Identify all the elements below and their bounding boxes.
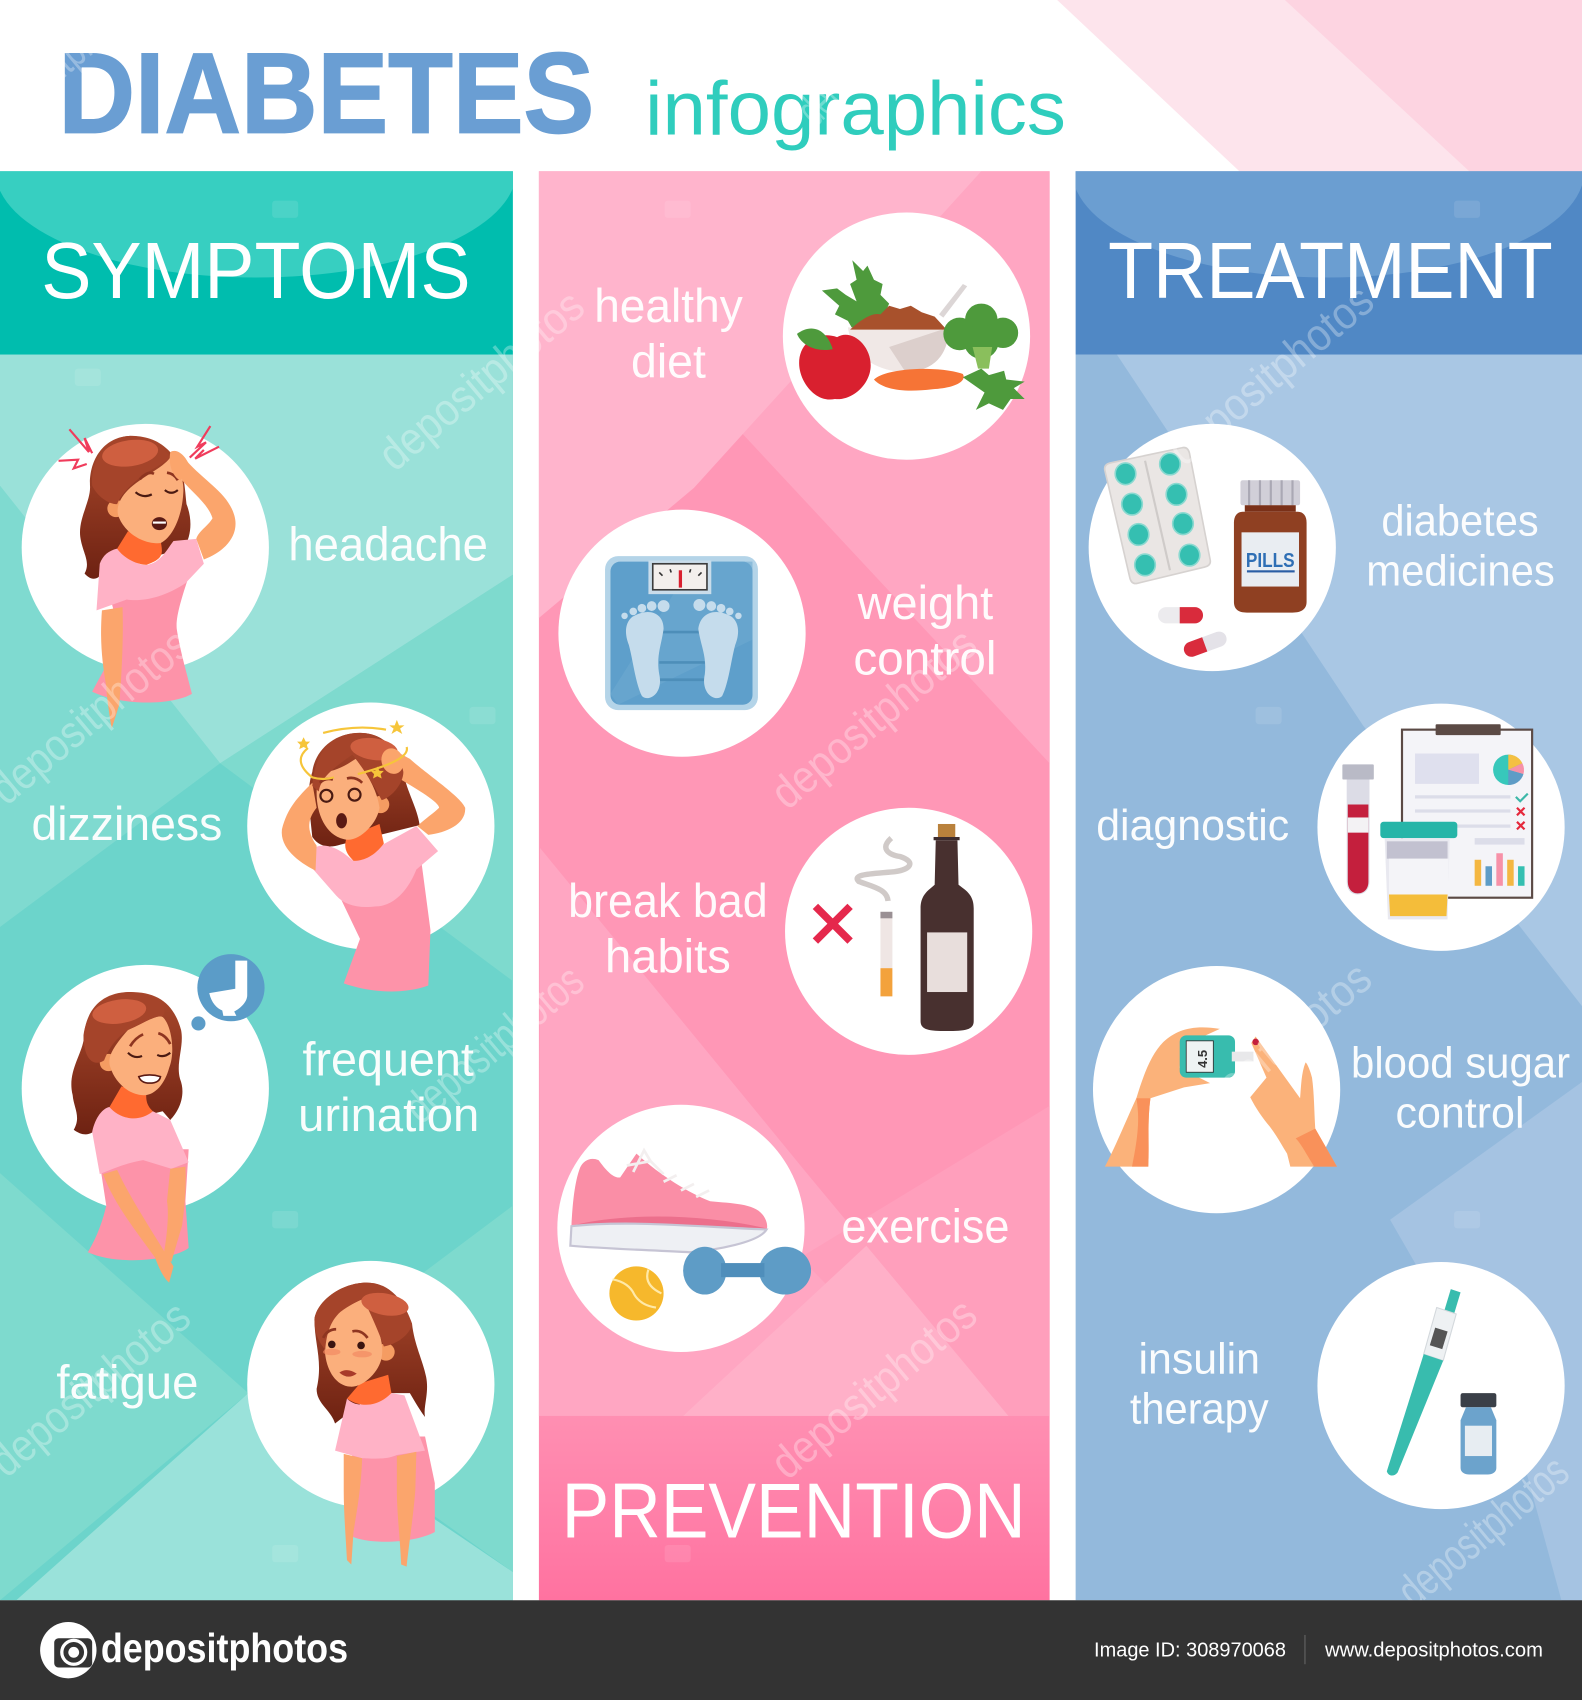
watermarks: depositphotos xyxy=(1158,274,1383,475)
treatment: diabetes medicines label xyxy=(1366,498,1555,595)
symptom label: headache: headache xyxy=(288,519,488,572)
footer band xyxy=(0,1600,1582,1700)
icon: blood sugar meter and hands xyxy=(1093,966,1340,1213)
treatment: insulin therapy label: therapy xyxy=(1130,1386,1269,1434)
watermarks: depositphotos xyxy=(761,1288,986,1489)
icon: diabetes medicines xyxy=(1089,424,1336,671)
icon: insulin pen and vial xyxy=(1317,1262,1565,1509)
icon: weight scale xyxy=(558,510,806,757)
prevention: break bad habits label: habits xyxy=(605,931,731,984)
prevention footer heading: PREVENTION xyxy=(562,1466,1026,1554)
treatment: diagnostic label: diagnostic xyxy=(1096,802,1289,850)
prevention: weight control label xyxy=(853,577,996,685)
faint camera watermarks xyxy=(75,201,1480,1562)
watermarks: depositphotos xyxy=(761,618,986,819)
panel: symptoms xyxy=(0,65,516,1600)
prevention: exercise label: exercise xyxy=(841,1200,1009,1253)
symptom: headache xyxy=(22,424,269,729)
treatment: insulin therapy label: insulin xyxy=(1139,1336,1260,1384)
icon: cigarette and alcohol xyxy=(785,808,1032,1055)
prevention: healthy diet label xyxy=(594,280,743,388)
footer divider xyxy=(1304,1635,1306,1664)
treatment header: TREATMENT xyxy=(1108,226,1553,316)
treatment: blood sugar control label: control xyxy=(1395,1090,1525,1138)
title: DIABETES xyxy=(59,30,594,157)
prevention: break bad habits label: break bad xyxy=(568,875,768,928)
symptoms header xyxy=(0,171,513,355)
treatment: diabetes medicines label: medicines xyxy=(1366,547,1555,595)
watermarks: depositphotos xyxy=(394,955,593,1133)
treatment: diabetes medicines label: diabetes xyxy=(1381,498,1539,546)
prevention: healthy diet label: diet xyxy=(631,335,706,388)
title: infographics xyxy=(645,66,1066,151)
footer image id: Image ID: 308970068 xyxy=(1094,1640,1286,1662)
symptoms header: SYMPTOMS xyxy=(41,226,471,316)
icon: toilet thought bubble xyxy=(191,954,265,1031)
symptom: fatigue xyxy=(247,1261,494,1567)
treatment: blood sugar control label: blood sugar xyxy=(1351,1040,1570,1088)
header decorative pink bands xyxy=(1057,0,1582,171)
panel: prevention xyxy=(539,171,1050,1600)
footer logo xyxy=(40,1622,348,1678)
title xyxy=(59,30,1066,157)
watermarks: depositphotos xyxy=(368,280,594,480)
symptom label: dizziness: dizziness xyxy=(31,798,222,851)
panel: treatment xyxy=(1072,65,1582,1600)
prevention: weight control label: control xyxy=(853,632,996,685)
treatment: insulin therapy label xyxy=(1130,1336,1269,1434)
icon: diabetes medicines: PILLS xyxy=(1246,549,1295,572)
symptom label: frequent urination: urination xyxy=(298,1089,479,1142)
symptom label: frequent urination xyxy=(298,1034,479,1142)
prevention: healthy diet label: healthy xyxy=(594,280,743,333)
treatment header xyxy=(1076,171,1582,354)
icon: blood sugar meter and hands: 4.5 xyxy=(1195,1050,1210,1068)
prevention: break bad habits label xyxy=(568,875,768,984)
watermarks: depositphotos xyxy=(1156,952,1381,1153)
treatment: blood sugar control label xyxy=(1351,1040,1570,1138)
symptom: dizziness xyxy=(247,703,494,991)
symptom: frequent urination xyxy=(22,954,269,1283)
footer url: www.depositphotos.com xyxy=(1324,1640,1543,1662)
icon: diagnostic clipboard and samples xyxy=(1317,704,1565,951)
icon: healthy food xyxy=(783,212,1030,460)
symptom label: fatigue: fatigue xyxy=(56,1357,198,1410)
footer logo: depositphotos xyxy=(101,1625,348,1671)
prevention footer heading xyxy=(539,1416,1050,1600)
icon: shoe, ball and dumbbell xyxy=(557,1105,811,1352)
symptom label: frequent urination: frequent xyxy=(303,1034,474,1087)
prevention: weight control label: weight xyxy=(857,577,993,630)
